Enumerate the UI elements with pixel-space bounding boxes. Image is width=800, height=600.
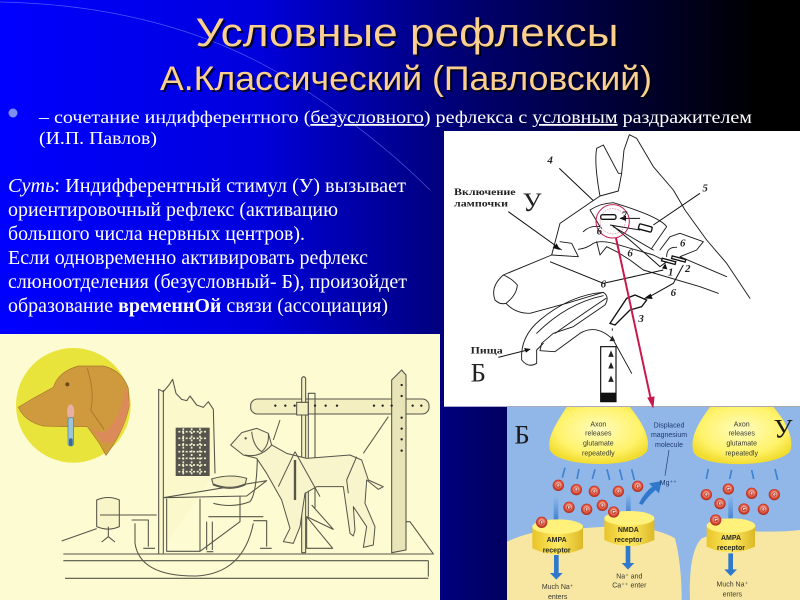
highlighted association (596, 205, 629, 238)
brain centres (601, 215, 686, 264)
diagram labels: 6 (601, 278, 607, 290)
panel: Pavlov experiment illustration (0, 334, 440, 600)
diagram labels: лампочки (454, 199, 509, 209)
icon: dog head inset (16, 348, 131, 463)
bullet (8, 108, 18, 118)
receptors (532, 511, 755, 554)
diagram labels: Пища (471, 346, 503, 356)
diagram labels: 6 (627, 248, 633, 260)
synapse captions: Axon (590, 421, 606, 428)
synapse captions: receptor (614, 537, 643, 544)
diagram labels: 6 (680, 238, 686, 250)
synapse captions: Much Na⁺ (717, 581, 748, 588)
test tube (601, 328, 616, 402)
labels B and U: У (774, 414, 793, 444)
synapse captions (542, 421, 758, 600)
salivary gland (610, 295, 647, 325)
essence text: большого числа нервных центров). (8, 224, 305, 245)
diagram labels: 7 (622, 209, 628, 221)
icon: dog in harness (231, 417, 388, 547)
labels B and U (514, 414, 793, 450)
beam holes (274, 384, 422, 452)
glutamate molecules (536, 480, 780, 528)
synapse captions: Ca⁺⁺ enter (612, 583, 647, 590)
title: Условные рефлексы (196, 11, 618, 55)
essence text: образование временнОй связи (ассоциация) (8, 296, 388, 317)
panel: synapse receptors diagram (507, 407, 800, 600)
icon: food bowl (212, 476, 247, 488)
synapse captions: releases (728, 431, 755, 438)
subtitle: А.Классический (Павловский) (162, 62, 654, 100)
synapse captions: Much Na⁺ (542, 584, 574, 591)
channel arrows (550, 481, 737, 580)
frame and table apparatus (62, 370, 433, 578)
synapse captions: magnesium (651, 432, 687, 439)
diagram labels: Б (471, 358, 486, 388)
synapse captions: glutamate (583, 441, 614, 448)
diagram labels: У (523, 187, 542, 217)
diagram labels: Включение (454, 188, 516, 198)
diagram labels (454, 154, 708, 388)
postsynaptic cells (507, 525, 800, 600)
title: Условные рефлексы (198, 13, 620, 57)
essence text: Суть: Индифферентный стимул (У) вызывает (8, 176, 406, 197)
panel: dog reflex arc diagram (444, 131, 800, 407)
axon terminals (549, 407, 791, 464)
arrow: association to synapse (616, 238, 654, 407)
synapse captions: repeatedly (725, 451, 758, 458)
synapse captions: releases (585, 431, 612, 438)
diagram labels: 3 (637, 313, 644, 325)
diagram labels: 2 (684, 263, 691, 275)
release arrows (562, 468, 778, 480)
synapse captions: Na⁺ and (616, 573, 643, 580)
diagram labels: 4 (546, 154, 553, 166)
diagram labels: 5 (702, 183, 708, 195)
essence text: ориентировочный рефлекс (активацию (8, 200, 338, 221)
definition text: (И.П. Павлов) (39, 128, 157, 149)
diagram labels: 6 (597, 225, 603, 237)
synapse captions: enters (723, 591, 743, 598)
diagram labels: 1 (668, 266, 673, 278)
definition text: – сочетание индифферентного ( безусловного ) рефлекса с условным раздражителем (38, 107, 752, 128)
maze picture on the panel (176, 428, 210, 476)
pathway arrows (498, 168, 700, 357)
synapse captions: glutamate (726, 441, 757, 448)
dog head outline (494, 135, 750, 373)
synapse captions: Axon (734, 421, 750, 428)
synapse captions: repeatedly (582, 451, 615, 458)
definition text (38, 107, 752, 149)
synapse captions: AMPA (547, 537, 567, 544)
labels B and U: Б (514, 420, 530, 450)
synapse captions: molecule (655, 442, 683, 449)
synapse captions: Displaced (654, 423, 684, 430)
synapse captions: NMDA (618, 527, 639, 534)
essence text: слюноотделения (безусловный- Б), произойдет (8, 272, 407, 293)
essence text: Если одновременно активировать рефлекс (8, 248, 368, 269)
synapse captions: Mg⁺⁺ (660, 480, 677, 487)
synapse captions: AMPA (721, 535, 741, 542)
synapse captions: receptor (543, 547, 571, 554)
diagram labels: 6 (671, 287, 677, 299)
essence text (8, 176, 407, 317)
subtitle: А.Классический (Павловский) (160, 60, 652, 98)
synapse captions: receptor (717, 545, 745, 552)
